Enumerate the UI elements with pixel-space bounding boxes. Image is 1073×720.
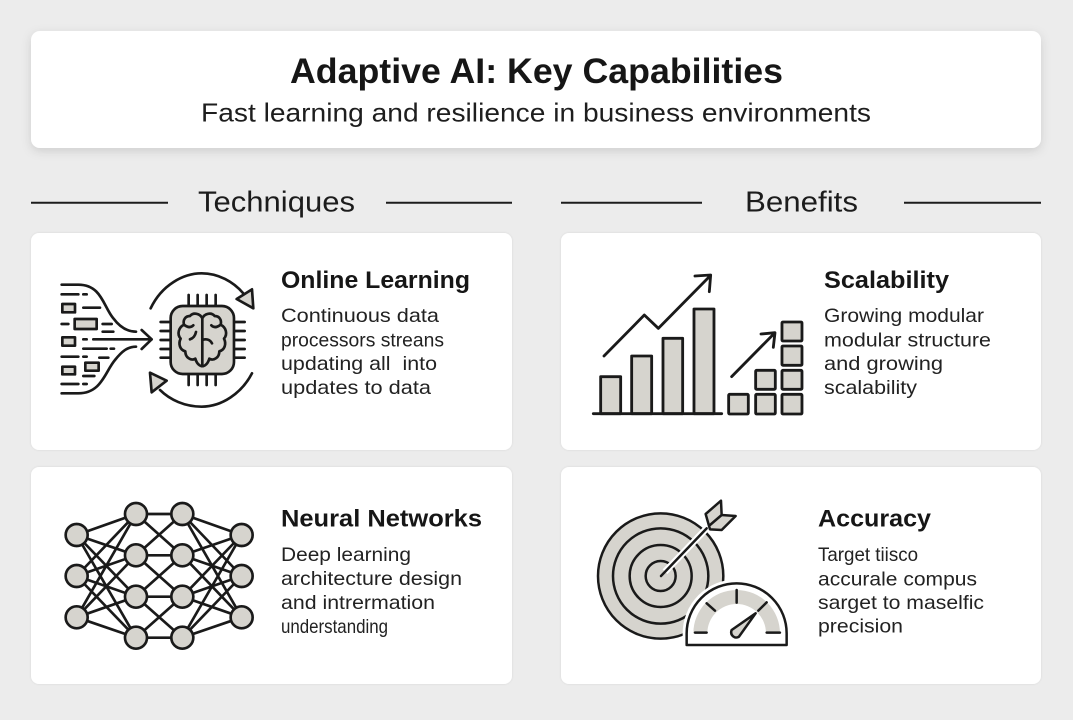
icon: data streams into AI chip with brain — [62, 273, 253, 407]
panel: Accuracy — [561, 467, 1041, 684]
description: scalability — [824, 377, 917, 399]
description — [281, 305, 444, 399]
section heading: Benefits: Benefits — [745, 186, 858, 218]
description: architecture design — [281, 568, 462, 590]
section heading: Techniques: Techniques — [198, 186, 355, 218]
header panel — [31, 31, 1041, 148]
heading: Scalability — [824, 267, 949, 294]
heading: Neural Networks — [281, 506, 482, 532]
panel: Neural Networks — [31, 467, 512, 684]
description — [818, 544, 984, 638]
subtitle: Fast learning and resilience in business environments — [201, 98, 871, 128]
panel: Scalability — [561, 233, 1041, 450]
description: sarget to maselfic — [818, 592, 984, 614]
description: understanding — [281, 616, 388, 638]
heading: Online Learning — [281, 267, 470, 294]
description: precision — [818, 616, 903, 638]
description — [281, 544, 462, 638]
description: accurale compus — [818, 568, 977, 590]
description: Growing modular — [824, 305, 985, 327]
description: processors streans — [281, 330, 444, 352]
description: modular structure — [824, 330, 991, 352]
icon: growth bars and blocks — [593, 275, 802, 414]
description: Deep learning — [281, 544, 411, 566]
description: Continuous data — [281, 305, 439, 327]
description: updating all into — [281, 353, 437, 375]
description: Target tiisco — [818, 544, 918, 566]
title: Adaptive AI: Key Capabilities — [290, 52, 783, 91]
description: updates to data — [281, 377, 431, 399]
heading: Accuracy — [818, 506, 931, 532]
icon: neural network — [66, 503, 253, 649]
description: and growing — [824, 353, 943, 375]
description — [824, 305, 991, 399]
icon: target with arrow and gauge — [598, 501, 787, 645]
panel: Online Learning — [31, 233, 512, 450]
description: and intrermation — [281, 592, 435, 614]
